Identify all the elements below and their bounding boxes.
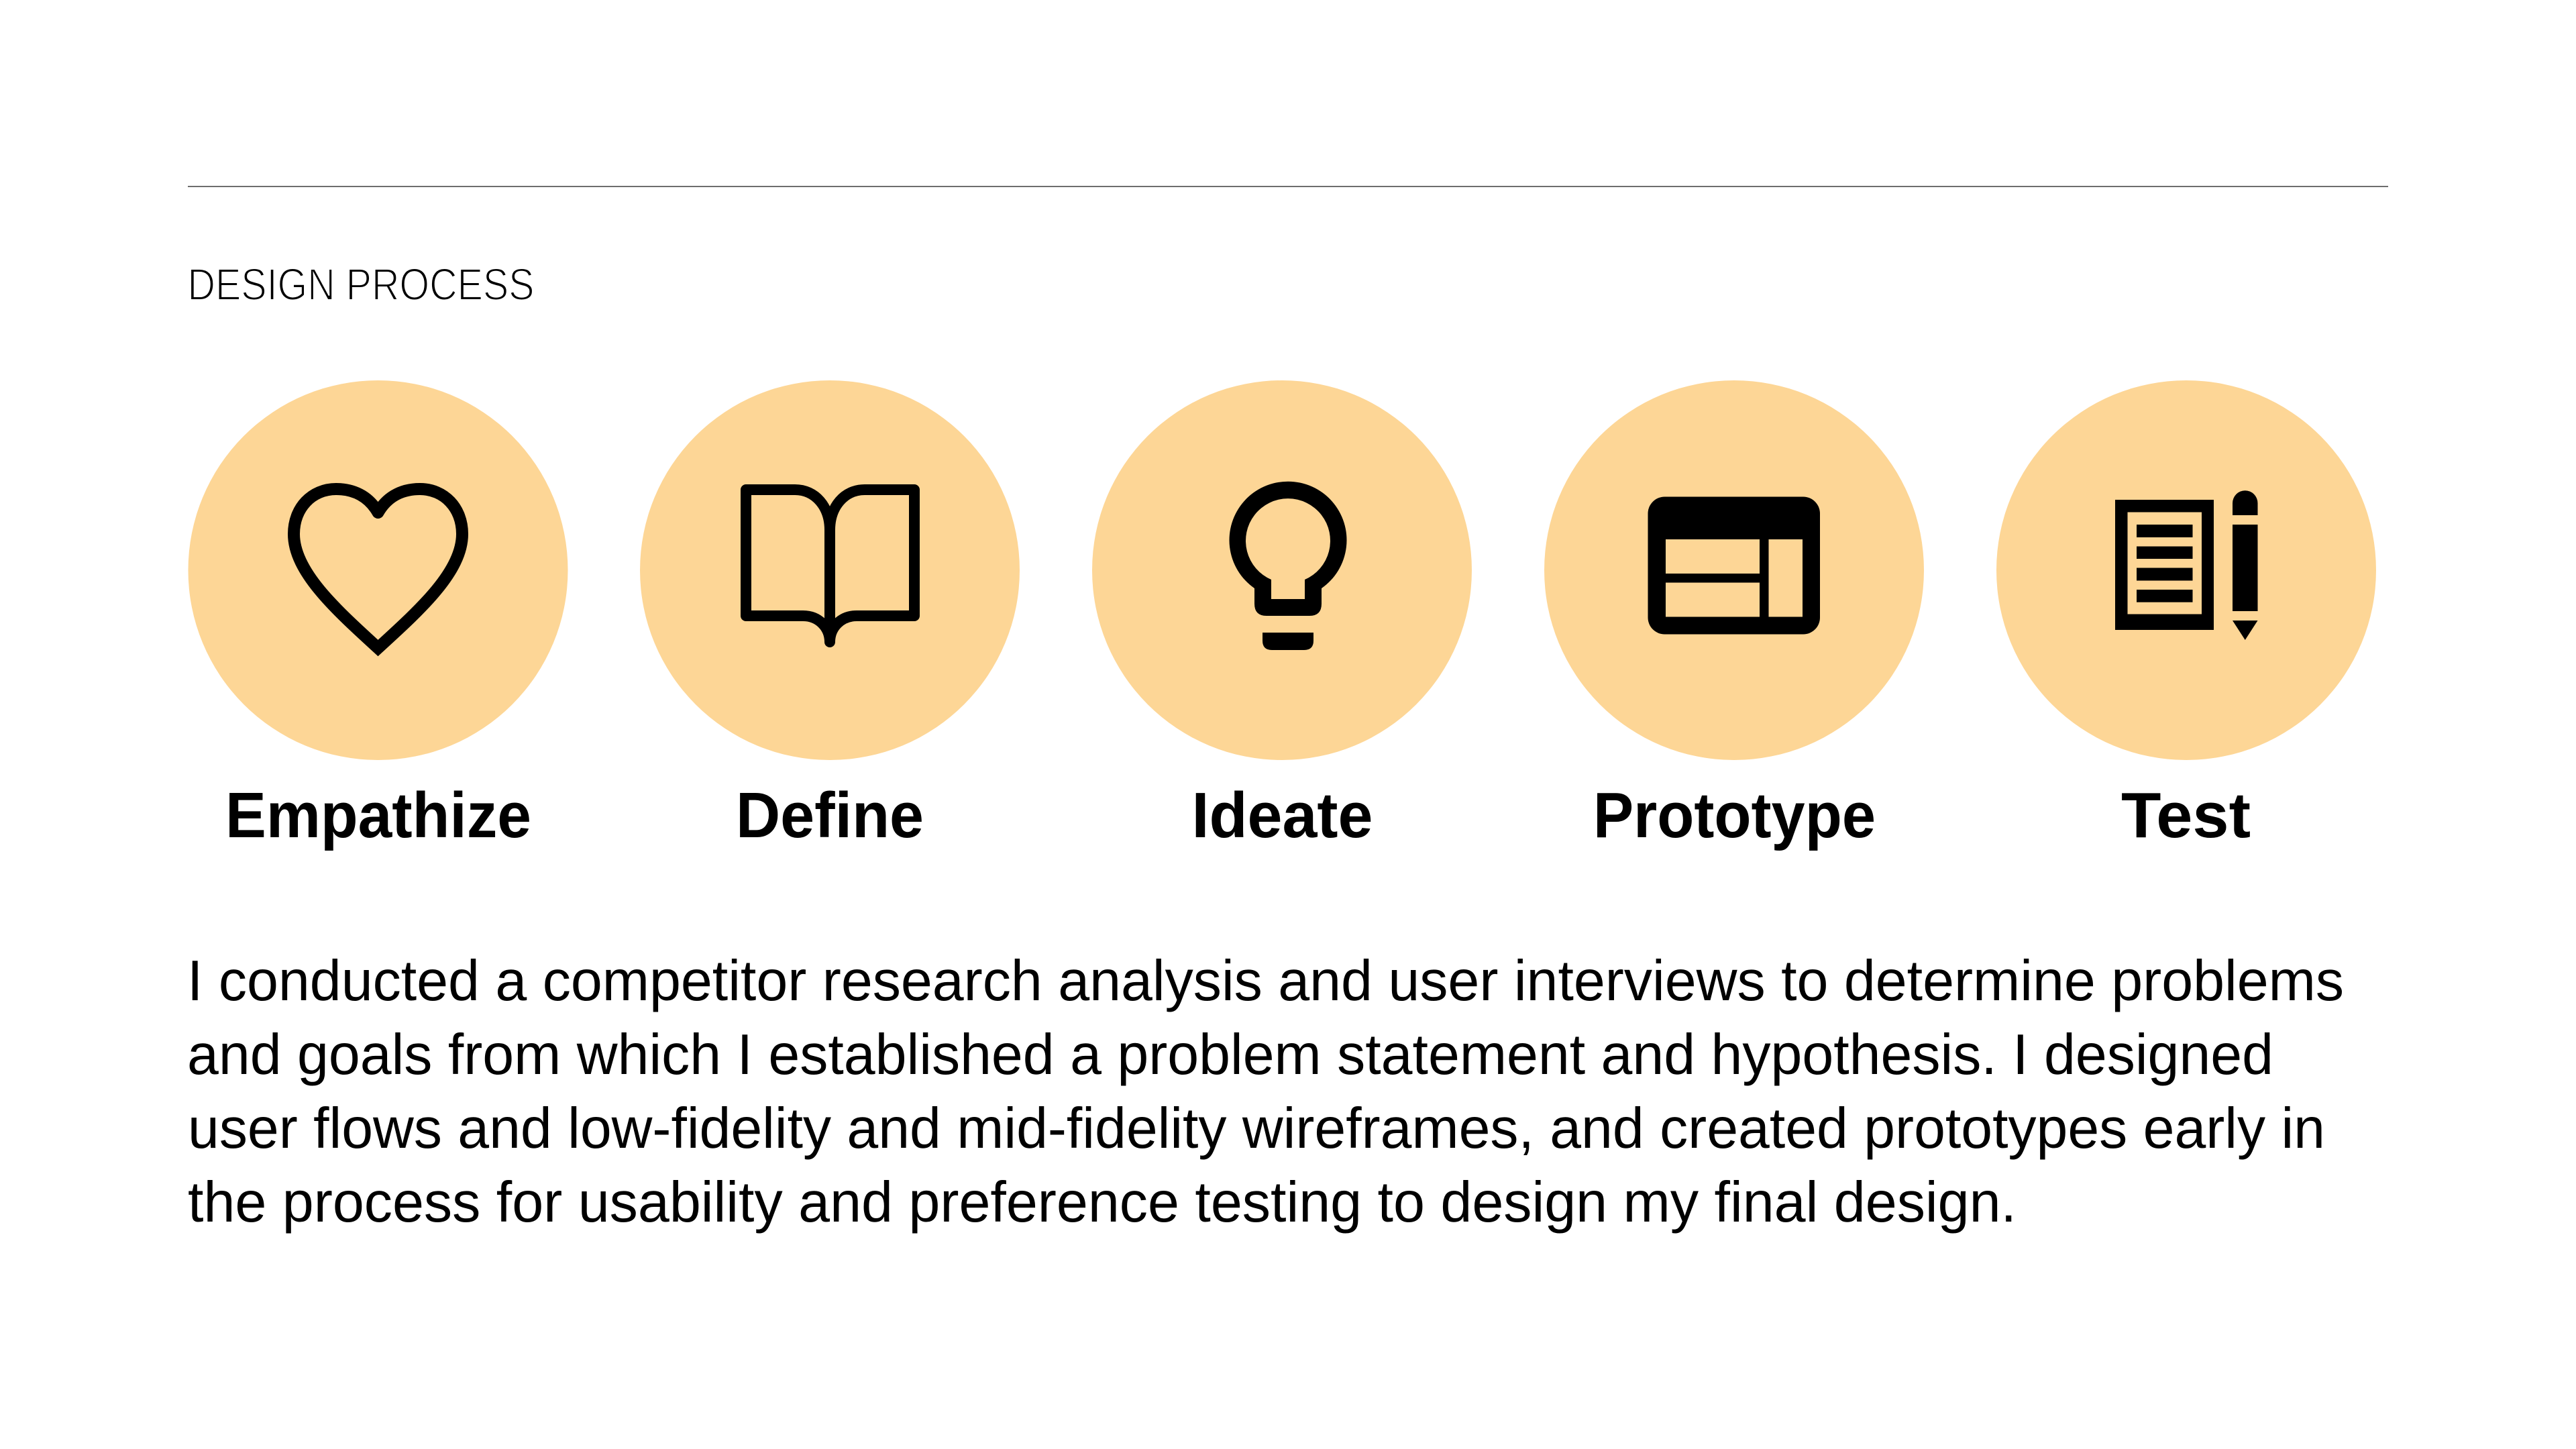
text block: process description: and goals from which I established a problem statement and hypothesis. I designed <box>187 1023 2273 1087</box>
icon: light bulb <box>1229 482 1346 650</box>
step: ideate <box>1092 380 1472 851</box>
step: prototype <box>1544 380 1924 851</box>
text block: process description: the process for usability and preference testing to design my final design. <box>188 1171 2017 1234</box>
icon: open book <box>746 490 914 642</box>
text block: process description <box>187 949 2344 1234</box>
circle: empathize <box>188 380 568 760</box>
icon: document and pencil <box>2115 490 2258 640</box>
label: test: Test <box>2121 780 2251 851</box>
label: define: Define <box>736 780 924 851</box>
icon: wireframe layout <box>1648 496 1820 635</box>
text block: process description: I conducted a competitor research analysis and user interviews to determine problems <box>187 949 2344 1013</box>
circle: ideate <box>1092 380 1472 760</box>
text block: process description: user flows and low-fidelity and mid-fidelity wireframes, and created prototypes early in <box>188 1097 2325 1161</box>
step: empathize <box>188 380 568 851</box>
label: empathize: Empathize <box>225 780 531 851</box>
circle: define <box>640 380 1020 760</box>
step: test <box>1996 380 2376 851</box>
circle: test <box>1996 380 2376 760</box>
step: define <box>640 380 1020 851</box>
circle: prototype <box>1544 380 1924 760</box>
icon: heart <box>294 489 462 648</box>
label: prototype: Prototype <box>1593 780 1876 851</box>
label: ideate: Ideate <box>1191 780 1373 851</box>
heading: design process: DESIGN PROCESS <box>188 260 534 310</box>
